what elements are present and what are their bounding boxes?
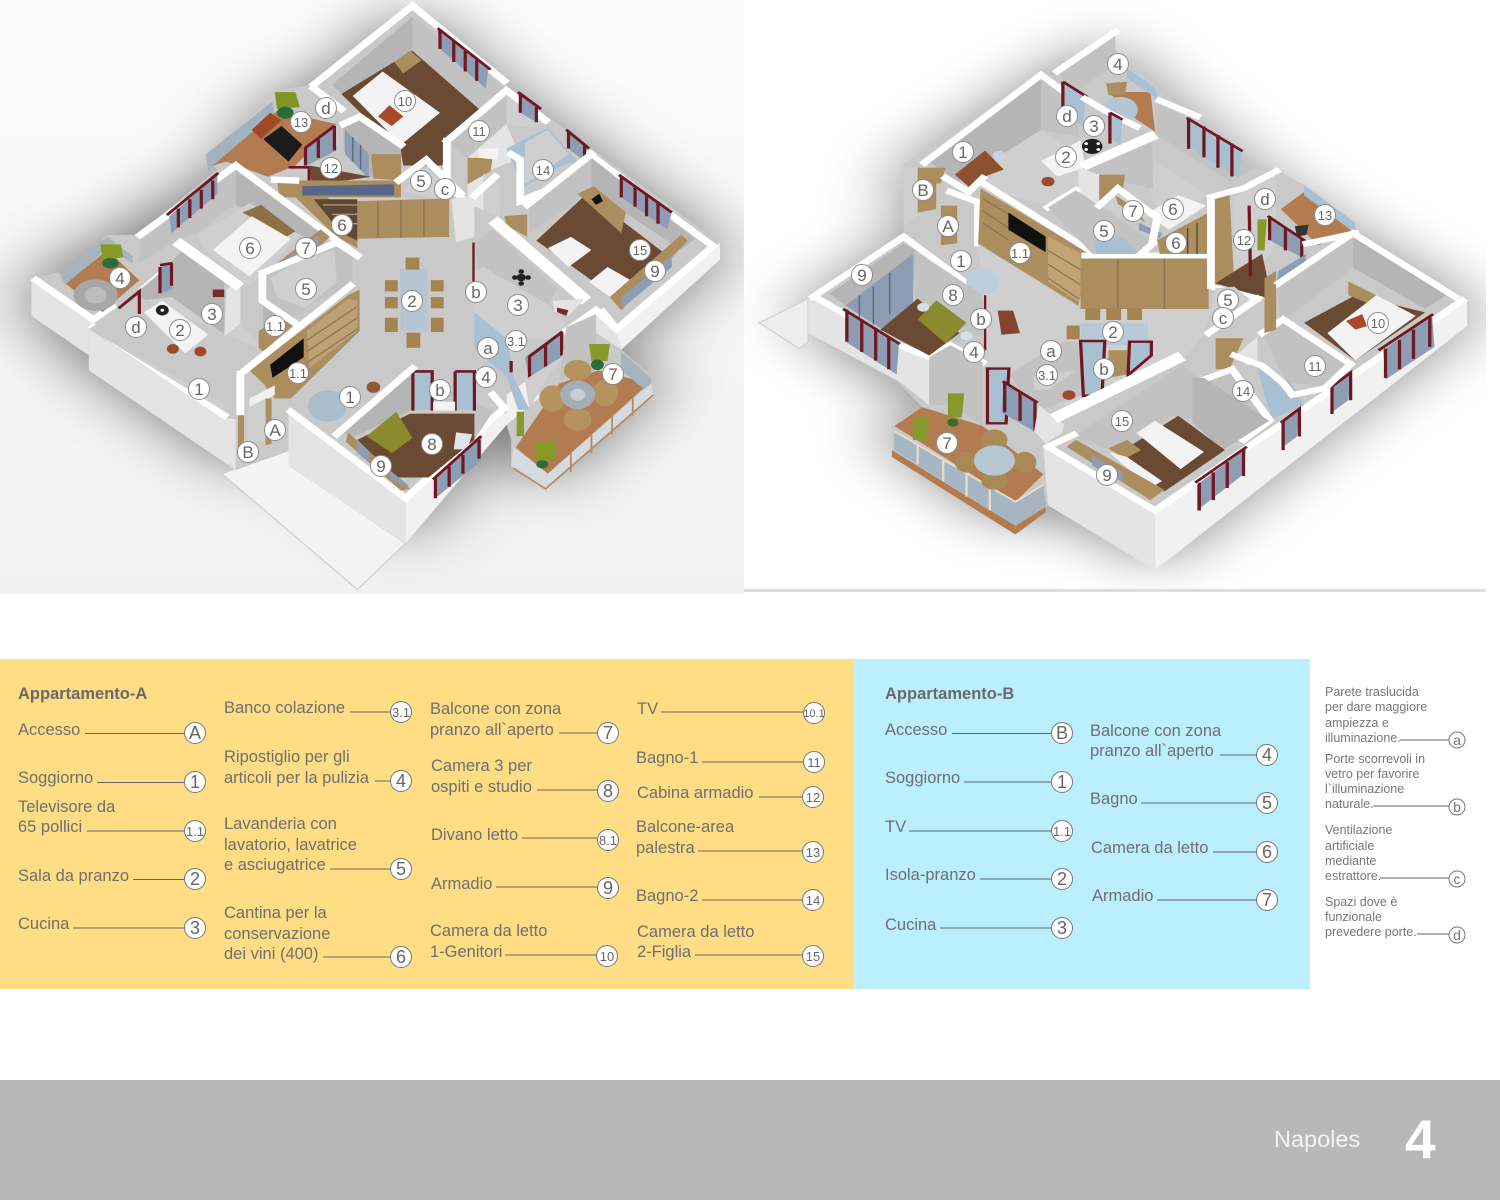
labels: plan B markers: 1 bbox=[956, 252, 966, 271]
panel: floor plan apartment B bbox=[744, 20, 1486, 592]
legend item: Cantina bbox=[224, 904, 412, 968]
wood storage wall bbox=[357, 173, 527, 243]
bathroom 5 B and bedroom 6 B bbox=[1048, 188, 1209, 254]
panel: legend apartment B bbox=[853, 659, 1310, 989]
legend item: Accesso B: Accesso bbox=[885, 721, 947, 739]
legend item: Cucina: 3 bbox=[190, 918, 200, 938]
labels: plan A markers: 6 bbox=[337, 216, 347, 235]
legend item: Bagno B bbox=[1090, 790, 1278, 814]
room: bathrooms 11 and 14 bbox=[447, 90, 589, 211]
room: closet 12 B and balcony 13 B bbox=[1211, 171, 1355, 333]
note b: vetro per favorire bbox=[1325, 767, 1420, 781]
labels: plan A markers: 6 bbox=[245, 239, 255, 258]
legend item: Cucina bbox=[18, 915, 206, 938]
legend item: Lavanderia: e asciugatrice bbox=[224, 856, 326, 874]
note a bbox=[1325, 685, 1465, 748]
labels: plan A markers: 14 bbox=[536, 163, 550, 178]
dining table bbox=[385, 258, 444, 348]
labels: plan B markers: 9 bbox=[1102, 466, 1112, 485]
legend item: Soggiorno: Soggiorno bbox=[18, 769, 93, 787]
labels: plan A markers: 3 bbox=[207, 305, 217, 324]
labels: plan A markers: a bbox=[483, 339, 493, 358]
note c: Ventilazione bbox=[1325, 823, 1392, 837]
labels: plan B markers: 12 bbox=[1237, 233, 1251, 248]
panel: design notes bbox=[1325, 685, 1465, 943]
legend item: Bagno-2 bbox=[636, 887, 824, 910]
labels: plan B markers: a bbox=[1046, 342, 1056, 361]
legend item: Soggiorno B: Soggiorno bbox=[885, 769, 960, 787]
labels: plan B markers: A bbox=[942, 217, 954, 236]
legend item: Accesso bbox=[18, 721, 206, 744]
legend item: Cucina B: Cucina bbox=[885, 916, 937, 934]
room: living A side bbox=[904, 32, 1115, 245]
wine cellar 6 bbox=[295, 197, 357, 248]
panel: floor plan apartment A bbox=[0, 0, 744, 594]
labels: plan A markers: 2 bbox=[175, 321, 185, 340]
labels: plan A markers: b bbox=[471, 283, 481, 302]
kitchen A right bbox=[473, 224, 598, 410]
legend item: Armadio bbox=[431, 875, 618, 898]
legend item: Cabina armadio bbox=[637, 784, 824, 808]
labels: plan B markers: 13 bbox=[1318, 208, 1332, 223]
kitchen A left bbox=[89, 244, 263, 410]
legend item: Televisore: 65 pollici bbox=[18, 818, 82, 836]
note d: Spazi dove è bbox=[1325, 895, 1397, 909]
labels: plan A markers: b bbox=[435, 381, 445, 400]
note c bbox=[1325, 823, 1465, 887]
legend item: Bagno B: Bagno bbox=[1090, 790, 1138, 808]
legend item: Soggiorno B bbox=[885, 769, 1072, 792]
legend item: TV: 10.1 bbox=[803, 708, 825, 720]
note b: naturale. bbox=[1325, 797, 1374, 811]
labels: plan A markers: 13 bbox=[294, 115, 308, 130]
labels: plan A markers: 1 bbox=[345, 388, 355, 407]
labels: plan A markers: 1 bbox=[194, 380, 204, 399]
labels: plan B markers: 6 bbox=[1171, 234, 1181, 253]
legend item: Televisore: 1.1 bbox=[186, 824, 204, 839]
legend item: Lavanderia: 5 bbox=[396, 859, 406, 879]
legend item: Bagno B: 5 bbox=[1262, 793, 1272, 813]
labels: plan B markers bbox=[852, 54, 1388, 486]
TV wall unit bbox=[238, 286, 360, 449]
note d: prevedere porte. bbox=[1325, 925, 1417, 939]
legend item: Accesso: A bbox=[189, 723, 201, 743]
legend item: Balcone-area palestra: Balcone-area bbox=[636, 818, 735, 836]
labels: plan B markers: c bbox=[1219, 309, 1228, 328]
legend item: Armadio B: Armadio bbox=[1092, 887, 1153, 905]
labels: plan B markers: 9 bbox=[857, 266, 867, 285]
legend item: Camera da letto 1 bbox=[430, 922, 618, 966]
legend item: Lavanderia: lavatorio, lavatrice bbox=[224, 836, 357, 854]
legend item: Ripostiglio: Ripostiglio per gli bbox=[224, 748, 350, 766]
note b bbox=[1325, 752, 1465, 815]
legend item: Camera da letto 1: Camera da letto bbox=[430, 922, 547, 940]
note a: per dare maggiore bbox=[1325, 700, 1427, 714]
legend item: Balcone con zona pranzo bbox=[430, 700, 618, 744]
legend item: Sala da pranzo: Sala da pranzo bbox=[18, 867, 129, 885]
labels: plan B markers: 8 bbox=[948, 286, 958, 305]
legend item: Cucina B bbox=[885, 916, 1072, 938]
labels: plan A markers: d bbox=[321, 99, 331, 118]
legend item: Armadio: 9 bbox=[603, 878, 613, 898]
note b: Porte scorrevoli in bbox=[1325, 752, 1425, 766]
legend item: Camera da letto 1: 10 bbox=[600, 949, 614, 964]
legend item: Bagno-1: 11 bbox=[807, 755, 821, 770]
labels: plan B markers: 6 bbox=[1168, 200, 1178, 219]
labels: plan A markers: 9 bbox=[376, 457, 386, 476]
labels: plan A markers: 3 bbox=[513, 296, 523, 315]
labels: plan A markers: 9 bbox=[650, 262, 660, 281]
legend item: Balcone B: 4 bbox=[1262, 745, 1272, 765]
heading: Appartamento-B: Appartamento-B bbox=[885, 685, 1014, 703]
note a: ampiezza e bbox=[1325, 716, 1389, 730]
labels: plan A markers: 12 bbox=[324, 161, 338, 176]
labels: plan A markers: d bbox=[131, 318, 141, 337]
legend item: Ripostiglio bbox=[224, 748, 412, 792]
legend item: Bagno-1: Bagno-1 bbox=[636, 749, 698, 767]
labels: plan A markers: 3.1 bbox=[507, 334, 525, 349]
labels: plan A markers: 7 bbox=[301, 239, 311, 258]
marble living floor and seating bbox=[966, 244, 1211, 409]
labels: plan B markers: 10 bbox=[1371, 316, 1385, 331]
labels: plan B markers: 3 bbox=[1089, 117, 1099, 136]
footer title: Napoles: Napoles bbox=[1274, 1126, 1360, 1152]
legend item: Bagno-1 bbox=[636, 749, 824, 772]
labels: plan B markers: 1 bbox=[958, 143, 968, 162]
legend item: Armadio B bbox=[1092, 887, 1278, 910]
legend item: Accesso B bbox=[885, 721, 1072, 744]
balcony 4 bbox=[59, 237, 139, 312]
legend item: Balcone B: pranzo all`aperto bbox=[1090, 742, 1214, 760]
page number: 4 bbox=[1405, 1108, 1436, 1170]
legend item: Cucina: Cucina bbox=[18, 915, 70, 933]
note c: artificiale bbox=[1325, 839, 1374, 853]
labels: plan A markers: c bbox=[441, 180, 450, 199]
room: breakfast a B bbox=[987, 340, 1176, 443]
legend item: Divano letto bbox=[431, 826, 618, 850]
balcony 4 plan B bbox=[1102, 68, 1255, 218]
legend item: Sala da pranzo: 2 bbox=[190, 869, 200, 889]
kitchen island B bbox=[1041, 99, 1153, 244]
legend item: Camera da letto 2: Camera da letto bbox=[637, 923, 754, 941]
legend item: Banco colazione bbox=[224, 699, 412, 722]
TV wall B bbox=[978, 182, 1092, 306]
legend item: Camera 3: Camera 3 per bbox=[431, 757, 532, 775]
legend item: Balcone con zona pranzo: Balcone con zona bbox=[430, 700, 562, 718]
labels: plan B markers: 1.1 bbox=[1011, 246, 1029, 261]
balcony 7 bbox=[511, 344, 653, 489]
labels: plan B markers: b bbox=[976, 310, 986, 329]
legend item: Camera da letto B: 6 bbox=[1262, 842, 1272, 862]
legend item: Cabina armadio: 12 bbox=[806, 790, 820, 805]
legend item: Balcone-area palestra bbox=[636, 818, 824, 862]
note d: funzionale bbox=[1325, 910, 1382, 924]
legend item: Camera da letto 2: 2-Figlia bbox=[637, 943, 692, 961]
legend item: Camera da letto 1: 1-Genitori bbox=[430, 943, 502, 961]
exterior walls bbox=[808, 237, 1467, 570]
note d: d bbox=[1453, 927, 1461, 943]
note c: estrattore. bbox=[1325, 869, 1381, 883]
footer band bbox=[0, 1080, 1500, 1200]
labels: plan B markers: 2 bbox=[1061, 148, 1071, 167]
room: bathrooms 11, 14, 5 B bbox=[1204, 278, 1351, 450]
legend item: Camera 3 bbox=[431, 757, 618, 802]
labels: plan B markers: 2 bbox=[1108, 323, 1118, 342]
bathroom 5 and cabinet 1.1 bbox=[259, 243, 357, 352]
legend item: TV: TV bbox=[637, 700, 658, 718]
labels: plan A markers: A bbox=[269, 421, 281, 440]
legend item: Bagno-2: Bagno-2 bbox=[636, 887, 698, 905]
panel: legend apartment A bbox=[0, 659, 853, 989]
legend item: Lavanderia: Lavanderia con bbox=[224, 815, 337, 833]
labels: plan B markers: d bbox=[1062, 107, 1072, 126]
labels: plan A markers bbox=[110, 90, 666, 476]
dining table B bbox=[1067, 308, 1148, 345]
legend item: Cabina armadio: Cabina armadio bbox=[637, 784, 753, 802]
balcony 7 B bbox=[892, 345, 1046, 535]
room: bedroom 10 bbox=[314, 6, 504, 165]
legend item: Isola-pranzo bbox=[885, 866, 1072, 890]
legend item: Camera da letto B bbox=[1091, 839, 1278, 862]
legend item: Camera da letto 2: 15 bbox=[806, 949, 820, 964]
note d bbox=[1325, 895, 1465, 943]
labels: plan A markers: 7 bbox=[608, 365, 618, 384]
legend item: Soggiorno B: 1 bbox=[1057, 772, 1067, 792]
legend item: Camera da letto 2 bbox=[637, 923, 824, 966]
legend item: Balcone con zona pranzo: pranzo all`aperto bbox=[430, 721, 554, 739]
legend item: Accesso: Accesso bbox=[18, 721, 80, 739]
legend item: Balcone-area palestra: palestra bbox=[636, 839, 696, 857]
labels: plan B markers: 5 bbox=[1099, 222, 1109, 241]
legend item: Camera da letto B: Camera da letto bbox=[1091, 839, 1208, 857]
labels: plan A markers: 1.1 bbox=[266, 319, 284, 334]
labels: plan A markers: 11 bbox=[472, 124, 486, 139]
legend item: Soggiorno: 1 bbox=[190, 772, 200, 792]
legend item: Cantina: Cantina per la bbox=[224, 904, 328, 922]
legend item: Armadio: Armadio bbox=[431, 875, 492, 893]
legend item: Sala da pranzo bbox=[18, 867, 206, 890]
labels: plan B markers: 7 bbox=[942, 434, 952, 453]
legend item: Balcone B: Balcone con zona bbox=[1090, 722, 1222, 740]
labels: plan B markers: B bbox=[917, 181, 929, 200]
labels: plan A markers: 5 bbox=[416, 172, 426, 191]
legend item: Camera 3: ospiti e studio bbox=[431, 778, 532, 796]
note b: l`illuminazione bbox=[1325, 782, 1404, 796]
labels: plan A markers: 1.1 bbox=[289, 366, 307, 381]
legend item: Banco colazione: 3.1 bbox=[392, 705, 410, 720]
room: bedroom 8 B bbox=[829, 244, 985, 374]
room: studio 8 bbox=[308, 368, 493, 498]
legend item: Cantina: conservazione bbox=[224, 925, 330, 943]
labels: plan A markers: 15 bbox=[633, 243, 647, 258]
note a: Parete traslucida bbox=[1325, 685, 1419, 699]
legend item: Banco colazione: Banco colazione bbox=[224, 699, 345, 717]
labels: plan B markers: 3.1 bbox=[1038, 368, 1056, 383]
legend item: Cantina: 6 bbox=[396, 947, 406, 967]
note b: b bbox=[1453, 799, 1461, 815]
wood storage wall B bbox=[1081, 254, 1209, 309]
legend item: Balcone B bbox=[1090, 722, 1278, 766]
labels: plan B markers: 7 bbox=[1128, 202, 1138, 221]
legend item: Soggiorno bbox=[18, 769, 206, 792]
legend item: Divano letto: 8.1 bbox=[599, 833, 617, 848]
labels: plan B markers: b bbox=[1099, 360, 1109, 379]
legend item: Isola-pranzo: Isola-pranzo bbox=[885, 866, 976, 884]
room: bedroom 15 B bbox=[1048, 364, 1269, 510]
labels: plan A markers: 10 bbox=[398, 94, 412, 109]
legend item: Accesso B: B bbox=[1056, 723, 1068, 743]
legend item: Televisore bbox=[18, 798, 206, 842]
legend item: Cucina B: 3 bbox=[1057, 918, 1067, 938]
legend item: Televisore: Televisore da bbox=[18, 798, 116, 816]
labels: plan A markers: 4 bbox=[481, 368, 491, 387]
legend item: Balcone con zona pranzo: 7 bbox=[603, 723, 613, 743]
legend item: Ripostiglio: 4 bbox=[396, 771, 406, 791]
labels: plan A markers: 5 bbox=[301, 280, 311, 299]
note a: a bbox=[1453, 732, 1461, 748]
room: bedroom 15 bbox=[527, 154, 695, 310]
room: bedroom 10 B bbox=[1276, 233, 1455, 380]
note a: illuminazione. bbox=[1325, 731, 1401, 745]
room: bedroom 6 bbox=[139, 165, 357, 286]
labels: plan B markers: 15 bbox=[1115, 414, 1129, 429]
labels: plan A markers: 8 bbox=[427, 435, 437, 454]
legend item: Ripostiglio: articoli per la pulizia bbox=[224, 769, 370, 787]
note c: mediante bbox=[1325, 854, 1376, 868]
legend item: Isola-pranzo: 2 bbox=[1057, 869, 1067, 889]
exterior walls bbox=[31, 154, 720, 543]
legend item: Armadio B: 7 bbox=[1262, 890, 1272, 910]
legend item: TV B: 1.1 bbox=[1053, 824, 1071, 839]
labels: plan B markers: 4 bbox=[1113, 55, 1123, 74]
legend item: Lavanderia bbox=[224, 815, 412, 880]
legend item: Cantina: dei vini (400) bbox=[224, 945, 318, 963]
labels: plan A markers: 4 bbox=[115, 269, 125, 288]
legend item: TV B bbox=[885, 818, 1072, 842]
room: walk-in closet 12 bbox=[275, 117, 461, 197]
labels: plan B markers: d bbox=[1260, 190, 1270, 209]
heading: Appartamento-A: Appartamento-A bbox=[18, 685, 147, 703]
room: gym balcony 13 bbox=[206, 88, 341, 180]
labels: plan A markers: 2 bbox=[407, 292, 417, 311]
legend item: TV bbox=[637, 700, 825, 724]
legend item: Bagno-2: 14 bbox=[806, 893, 820, 908]
labels: plan B markers: 5 bbox=[1223, 291, 1233, 310]
note c: c bbox=[1454, 871, 1460, 887]
legend item: Camera 3: 8 bbox=[603, 781, 613, 801]
legend item: Balcone-area palestra: 13 bbox=[806, 845, 820, 860]
legend item: TV B: TV bbox=[885, 818, 906, 836]
labels: plan B markers: 4 bbox=[969, 343, 979, 362]
labels: plan B markers: 14 bbox=[1236, 384, 1250, 399]
labels: plan B markers: 11 bbox=[1308, 359, 1322, 374]
legend item: Divano letto: Divano letto bbox=[431, 826, 518, 844]
labels: plan A markers: B bbox=[242, 443, 254, 462]
